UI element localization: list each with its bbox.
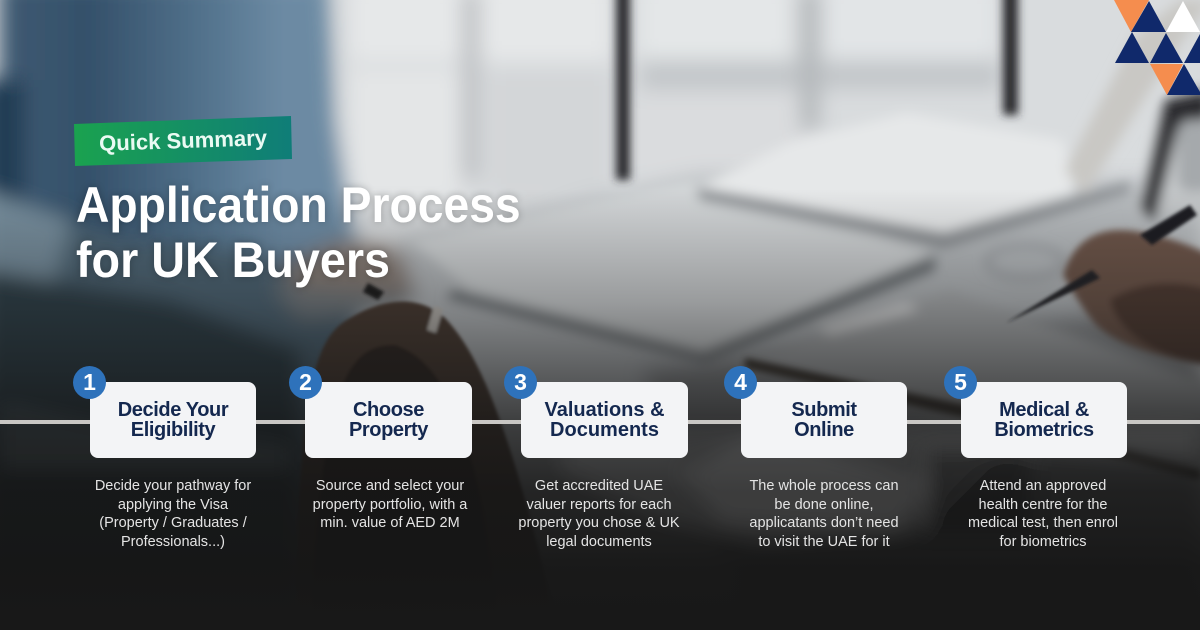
tag: Quick Summary xyxy=(74,116,292,166)
title: Application Process xyxy=(76,177,521,233)
title xyxy=(76,177,522,288)
step 3 card: Documents xyxy=(550,419,659,441)
step 4 description: to visit the UAE for it xyxy=(758,534,890,550)
window bars xyxy=(616,0,1018,180)
step 3 card: Valuations & xyxy=(544,398,665,420)
step 5 description: health centre for the xyxy=(978,497,1107,513)
step 2 card xyxy=(305,382,472,458)
laptop screen xyxy=(1065,0,1200,195)
step 1 description xyxy=(95,478,251,550)
step 4 description: be done online, xyxy=(774,497,874,513)
step 5 description: Attend an approved xyxy=(980,478,1106,494)
step 1 description: Professionals...) xyxy=(121,534,225,550)
step 4 description: applicatants don’t need xyxy=(749,515,899,531)
step 3 badge: 3 xyxy=(514,369,527,395)
step 4 card: Online xyxy=(794,419,854,441)
foreground hand xyxy=(296,301,560,630)
step 5 badge xyxy=(944,366,977,399)
step 4 card: Submit xyxy=(791,398,857,420)
step 5 card xyxy=(961,382,1127,458)
step 5 badge: 5 xyxy=(954,369,967,395)
step 5 card: Biometrics xyxy=(994,419,1094,441)
step 3 description: legal documents xyxy=(546,534,652,550)
step 2 description: min. value of AED 2M xyxy=(320,515,460,531)
step 4 badge: 4 xyxy=(734,369,747,395)
step 5 card: Medical & xyxy=(999,398,1089,420)
title: for UK Buyers xyxy=(76,232,390,288)
step 2 badge xyxy=(289,366,322,399)
step 1 card: Eligibility xyxy=(131,419,215,441)
step 3 description xyxy=(518,478,680,550)
step 4 description xyxy=(749,478,899,550)
lower desk and keyboard glow xyxy=(0,400,1200,545)
step 5 description xyxy=(968,478,1118,550)
right hand xyxy=(1063,230,1200,365)
step 4 card xyxy=(741,382,907,458)
closed laptop xyxy=(696,113,1075,233)
step 2 description: Source and select your xyxy=(316,478,464,494)
tag: Quick Summary: Quick Summary xyxy=(99,125,268,156)
step 1 description: (Property / Graduates / xyxy=(99,515,247,531)
step 2 description xyxy=(313,478,468,531)
ring xyxy=(427,306,443,333)
big notebook xyxy=(410,178,933,352)
clipboard edge xyxy=(745,358,1200,480)
markers xyxy=(818,303,920,335)
step 4 description: The whole process can xyxy=(749,478,899,494)
step 3 description: valuer reports for each xyxy=(526,497,672,513)
step 2 card: Choose xyxy=(353,398,424,420)
step 3 card xyxy=(521,382,688,458)
step 1 card: Decide Your xyxy=(118,398,228,420)
step 1 description: Decide your pathway for xyxy=(95,478,251,494)
step 1 description: applying the Visa xyxy=(118,497,228,513)
step 4 badge xyxy=(724,366,757,399)
step 2 badge: 2 xyxy=(299,369,312,395)
step 1 badge xyxy=(73,366,106,399)
step 2 card: Property xyxy=(349,419,428,441)
glass xyxy=(987,246,1063,278)
horizontal timeline line xyxy=(0,420,1200,424)
step 3 description: property you chose & UK xyxy=(518,515,680,531)
step 1 card xyxy=(90,382,256,458)
step 2 description: property portfolio, with a xyxy=(313,497,467,513)
pens xyxy=(1006,270,1100,323)
step 5 description: medical test, then enrol xyxy=(968,515,1118,531)
paper xyxy=(745,290,1200,460)
logo: triangle mark xyxy=(1114,0,1200,95)
step 3 badge xyxy=(504,366,537,399)
step 1 badge: 1 xyxy=(83,369,96,395)
step 5 description: for biometrics xyxy=(999,534,1087,550)
step 3 description: Get accredited UAE xyxy=(535,478,663,494)
right side stand xyxy=(1135,95,1200,215)
